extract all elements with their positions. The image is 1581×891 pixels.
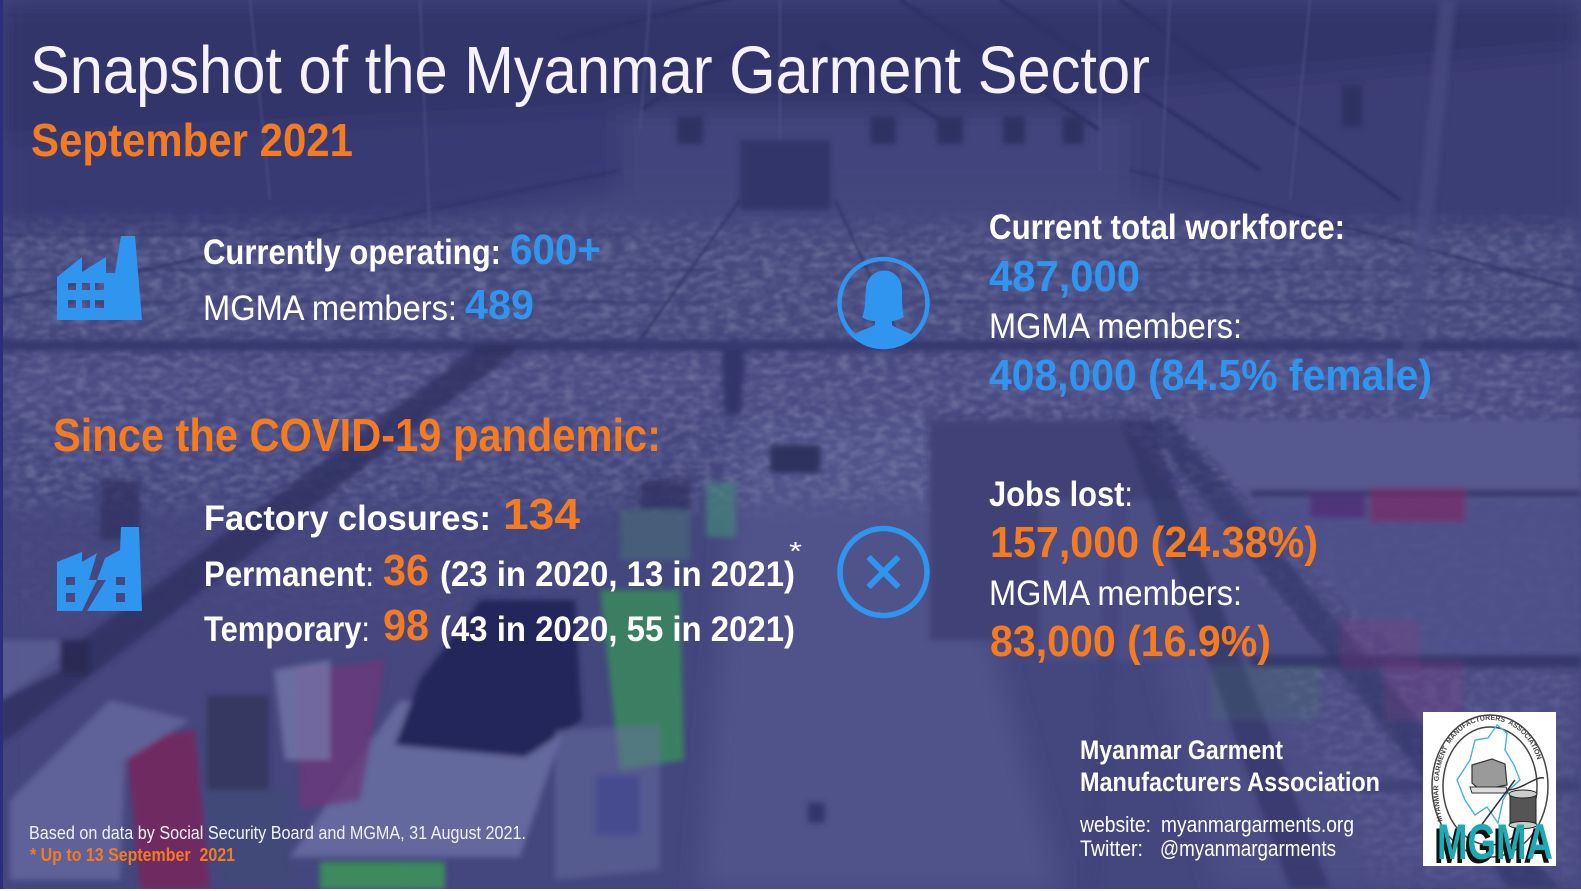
number: 600+: 600+	[510, 226, 601, 274]
title: Snapshot of the Myanmar Garment Sector	[30, 33, 1150, 108]
logo: MGMA: MYANMAR GARMENT MANUFACTURERS ASSOCIATION	[1433, 716, 1542, 822]
number: 36: 36	[383, 546, 429, 595]
label: current total workforce: Current total workforce:	[989, 208, 1345, 247]
number: 157,000: 157,000 (24.38%)	[990, 518, 1318, 567]
icon: cross in circle	[840, 528, 927, 616]
icon: closed factory	[57, 527, 142, 611]
temporary breakdown: (43 in 2020, 55 in 2021)	[440, 610, 795, 649]
text block: factory closures	[204, 490, 802, 650]
label: temporary: Temporary:	[204, 610, 370, 649]
logo: MGMA	[1423, 712, 1556, 874]
website label: website:	[1079, 812, 1151, 837]
label: currently operating: Currently operating:	[203, 233, 501, 272]
organisation name line two: Manufacturers Association	[1080, 767, 1380, 797]
source note	[29, 823, 526, 865]
label: jobs lost: Jobs lost:	[989, 475, 1133, 514]
number: 98: 98	[383, 601, 429, 650]
subtitle date: September 2021	[31, 114, 353, 166]
organisation name: Myanmar Garment	[1080, 735, 1283, 765]
twitter handle: @myanmargarments	[1160, 836, 1336, 861]
website: myanmargarments.org	[1161, 812, 1354, 837]
label: MGMA members: MGMA members:	[989, 307, 1242, 346]
twitter label: Twitter:	[1080, 836, 1143, 861]
footnote asterisk: *	[789, 536, 802, 566]
label: permanent: Permanent:	[204, 555, 374, 594]
heading: since COVID-19: Since the COVID-19 pandemic:	[53, 409, 661, 461]
permanent breakdown: (23 in 2020, 13 in 2021)	[440, 555, 795, 594]
icon: female worker in circle	[840, 259, 928, 349]
number: 408,000 female: 408,000 (84.5% female)	[989, 351, 1432, 400]
footnote date: * Up to 13 September 2021	[30, 845, 235, 865]
text block: jobs lost	[989, 475, 1318, 666]
number: 487,000: 487,000	[989, 252, 1140, 301]
label: MGMA members: MGMA members:	[203, 289, 457, 328]
number: 134: 134	[503, 490, 581, 539]
organisation contact block	[1079, 735, 1380, 861]
label: MGMA members: MGMA members:	[989, 574, 1242, 613]
icon: operating factory	[57, 236, 142, 320]
data source: Based on data by Social Security Board and MGMA, 31 August 2021.	[29, 823, 526, 843]
number: 83,000: 83,000 (16.9%)	[990, 617, 1271, 666]
label: factory closures: Factory closures:	[204, 499, 491, 538]
number: 489: 489	[465, 281, 534, 328]
text block: factories operating	[203, 226, 601, 328]
text block: workforce	[989, 208, 1432, 400]
